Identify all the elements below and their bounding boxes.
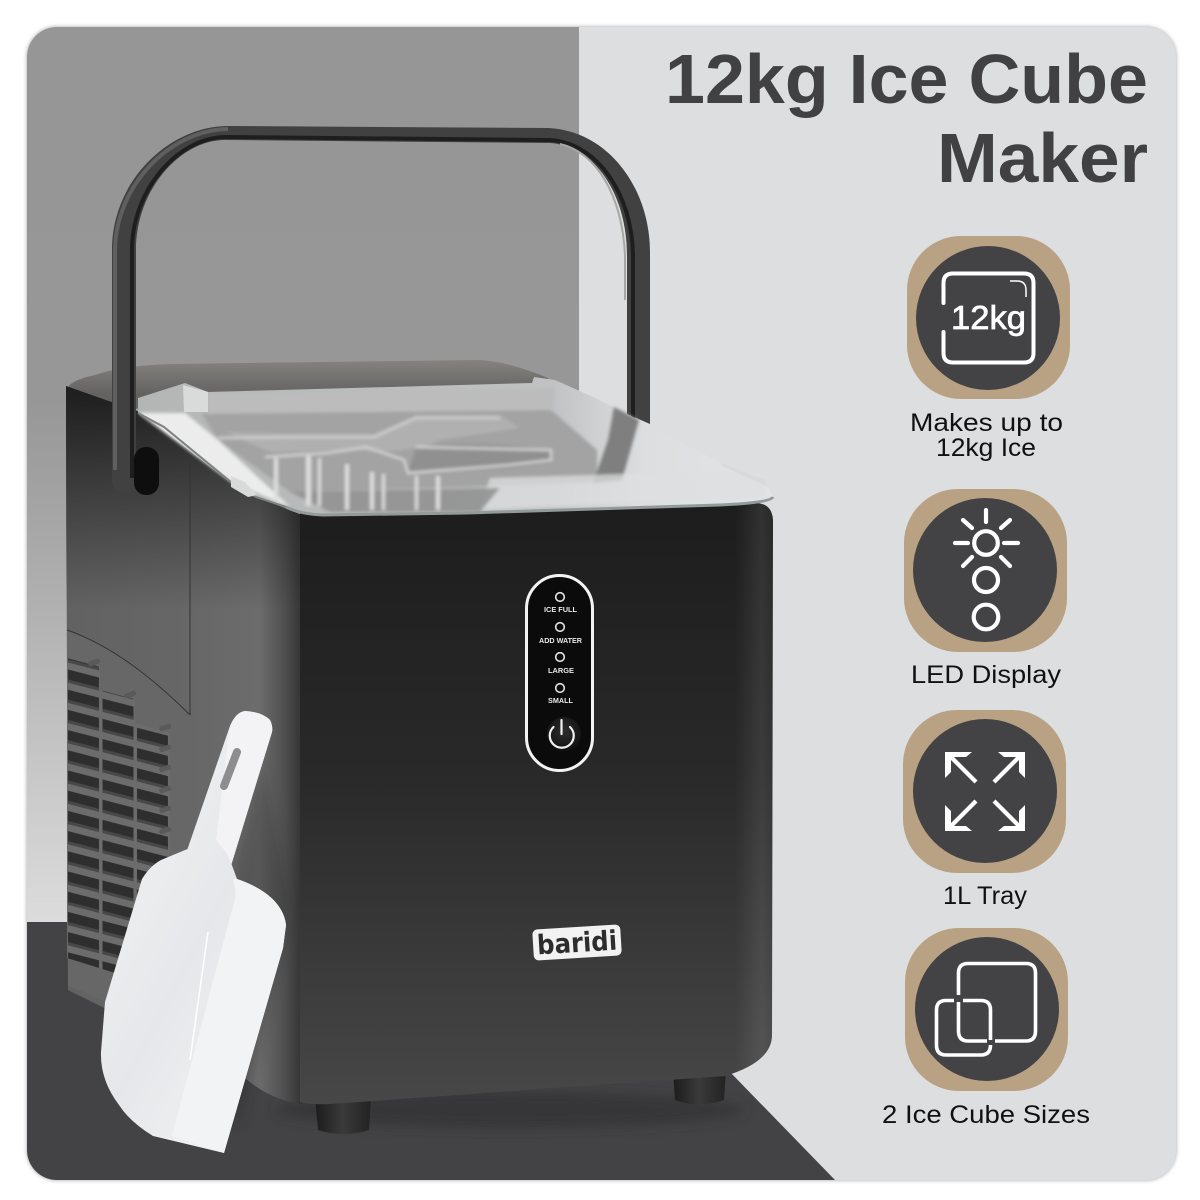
feature: 2 ice cube sizes [882,928,1090,1129]
power button [547,717,581,751]
right light panel [578,27,1176,1180]
indicator labels [539,605,583,705]
carry handle [112,126,650,494]
title: 12kg Ice Cube [665,40,1148,118]
indicator lights [556,593,564,692]
scoop shadow [200,760,290,1130]
indicator labels: ICE FULL [544,605,577,614]
product: ice maker [66,126,773,1153]
title [665,40,1148,197]
indicator labels: SMALL [548,696,573,705]
clear lid [138,377,773,515]
indicator labels: LARGE [548,666,574,675]
label: 12kg Ice [936,434,1036,462]
feature: 1L tray [903,710,1066,910]
scoop handle face [216,711,272,864]
machine feet [315,1070,726,1134]
label [910,409,1063,462]
handle pivot [134,447,159,495]
control panel [526,576,592,770]
lid hinge clips [183,385,768,497]
label: 2 Ice Cube Sizes [882,1101,1090,1129]
title: Maker [937,119,1148,197]
grey rear top cover [66,360,548,410]
lid reflections [138,388,768,512]
scoop crease [172,879,286,1153]
scoop highlight [190,932,208,1060]
label: 1L Tray [943,882,1028,910]
ice scoop [101,711,286,1153]
brand logo: baridi [536,926,618,961]
vent slat ends [88,658,172,835]
label: LED Display [911,661,1062,689]
icon: two squares [905,928,1068,1091]
icon: 12kg capacity: 12kg [951,299,1026,336]
machine side panel [66,386,302,1104]
vent housing [67,630,190,1040]
dark floor [27,922,835,1180]
feature: LED display [904,489,1067,689]
label: Makes up to [910,409,1063,437]
lid rim [286,497,773,515]
icon: expanding arrows [903,710,1066,873]
icon: 12kg capacity [907,236,1070,399]
floor shadow [275,1092,745,1128]
indicator labels: ADD WATER [539,636,583,645]
feature: makes up to 12kg ice [907,236,1070,462]
machine front body [300,503,773,1104]
vent slots [67,658,170,990]
scoop handle hole [224,752,237,786]
left grey wall [27,27,579,923]
icon: LED lights [904,489,1067,652]
